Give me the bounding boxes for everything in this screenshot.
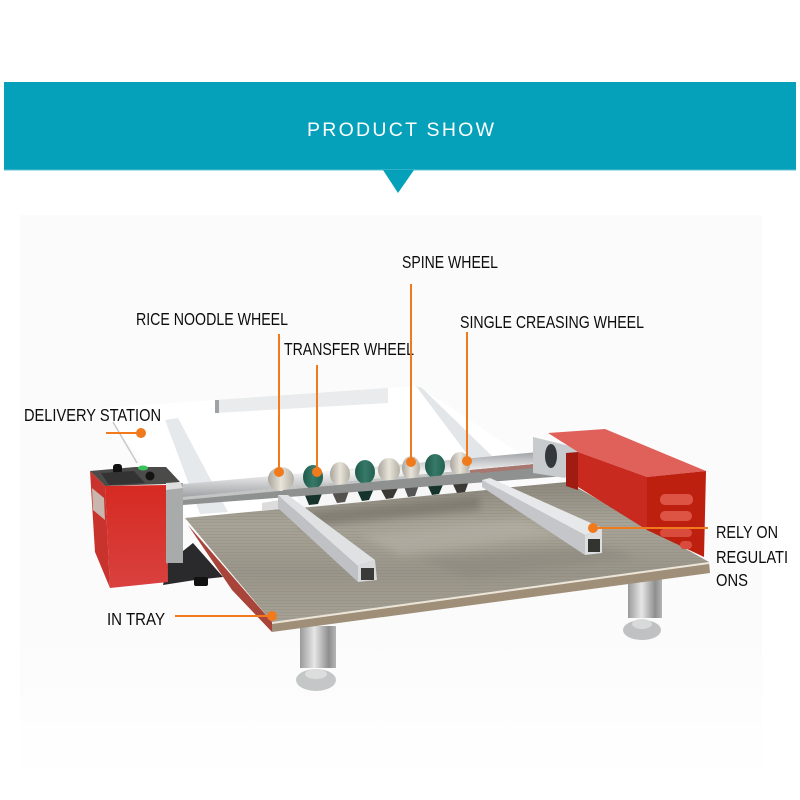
right red motor box	[533, 429, 706, 557]
label: rely on regulations	[588, 522, 788, 590]
front right rail	[482, 478, 602, 555]
label: spine wheel: SPINE WHEEL	[402, 252, 498, 272]
left red control box	[90, 464, 183, 588]
label: rice noodle wheel	[136, 309, 288, 477]
label: transfer wheel: TRANSFER WHEEL	[284, 339, 414, 359]
label: rely on regulations: REGULATI	[716, 547, 788, 567]
banner title: PRODUCT SHOW	[307, 119, 495, 141]
label: single creasing wheel	[460, 312, 644, 466]
leg right	[623, 578, 662, 640]
label: in tray: IN TRAY	[107, 609, 165, 629]
left back rail	[165, 418, 228, 514]
wheels on the shaft	[268, 452, 480, 497]
label: in tray	[107, 609, 277, 629]
label: transfer wheel	[284, 339, 414, 477]
label: delivery station: DELIVERY STATION	[24, 405, 161, 425]
right back rail	[416, 386, 492, 458]
panel: product photo background	[20, 215, 762, 780]
leg left	[296, 626, 336, 691]
black cables	[163, 543, 223, 586]
in tray	[185, 482, 710, 632]
shaft	[183, 451, 566, 505]
paper delivery station	[100, 386, 545, 520]
front left rail	[278, 495, 377, 582]
label: rely on regulations: ONS	[716, 570, 748, 590]
label: rely on regulations: RELY ON	[716, 522, 778, 542]
banner: product show	[4, 82, 796, 193]
label: rice noodle wheel: RICE NOODLE WHEEL	[136, 309, 288, 329]
back rail	[215, 388, 388, 413]
label: delivery station	[24, 405, 161, 438]
tray reflections	[300, 496, 640, 578]
machine illustration	[90, 386, 710, 691]
wheels lower teeth	[262, 476, 486, 511]
label: spine wheel	[402, 252, 498, 467]
label: single creasing wheel: SINGLE CREASING WHEEL	[460, 312, 644, 332]
